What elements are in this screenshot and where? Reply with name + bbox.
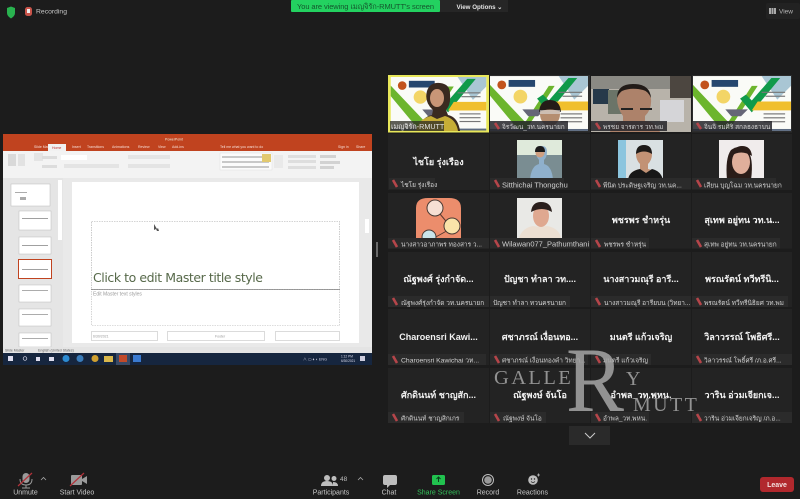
slide canvas: 6/30/2021 <box>93 334 109 338</box>
PowerPoint title bar: Transitions <box>87 145 104 149</box>
tile: name only <box>591 309 691 365</box>
status bar: English (United States) <box>38 348 74 352</box>
tile: name only: Charoensri Kawi... <box>399 332 478 342</box>
subtitle placeholder <box>91 289 340 326</box>
tile: name only: พชรพร ชำหรุ่น <box>604 240 647 248</box>
tile: name only <box>388 252 489 307</box>
tile: slide 4: จินจิ รมศิริ สกลธงธาบน <box>704 123 771 131</box>
status bar: Slide Master <box>5 348 25 352</box>
tile: name only: ณัฐพงศ์ รุ่งกำจัด... <box>403 273 474 285</box>
view options button: View Options ⌄ <box>456 4 502 11</box>
tile: name only <box>692 193 792 248</box>
participants: 48 <box>340 476 348 483</box>
tile: name only: พรณรัตน์ ทวีทรีนิ... <box>705 273 779 284</box>
chat <box>382 475 397 496</box>
PowerPoint title bar: Add-ins <box>172 145 184 149</box>
unmute <box>13 473 46 496</box>
divider handle <box>376 242 378 257</box>
cursor <box>154 224 159 231</box>
slide canvas: Footer <box>215 334 226 338</box>
tile: Wilawan: Wilawan077_Pathumthani <box>502 240 589 248</box>
tile: name only: วิลาวรรณ์ โพธิศรี... <box>703 331 780 342</box>
reactions: Reactions <box>517 490 549 496</box>
tile: man with glasses <box>591 76 691 132</box>
watermark: GALLERY RMUTT: Y <box>626 368 640 390</box>
tile: name only: ณัฐพงษ์ จันโอ <box>513 389 567 401</box>
tile: presenter: เมญจิรัก-RMUTT <box>391 122 445 131</box>
PowerPoint title bar: Home <box>52 146 61 150</box>
tile: name only <box>388 368 489 423</box>
windows taskbar: ∧ ▭ ♦ ◖ ENG <box>303 358 327 362</box>
tile: name only <box>490 309 590 365</box>
tile: name only: พรณรัตน์ ทวีทรีนิธิยศ วท.พม <box>704 299 784 307</box>
tile: name only: สุเทพ อยู่ทน วท.น... <box>704 215 780 226</box>
tile: name only <box>591 252 691 307</box>
leave button: Leave <box>767 482 787 489</box>
participants <box>313 475 363 496</box>
share screen: Share Screen <box>417 490 460 496</box>
tile: name only <box>388 309 489 365</box>
slide canvas <box>63 178 372 348</box>
tile: orange avatar icon: นางสาวอาภาพร ทองสาร ว... <box>401 242 482 248</box>
tile: name only: ณัฐพงษ์ จันโอ <box>503 414 542 422</box>
tile: name only: วาริน อ่วมเจียกเจ... <box>705 390 779 400</box>
tile: name only: วาริน อ่วมเจียกเจริญ /ภ.อ... <box>704 414 781 422</box>
tile: name only <box>591 193 691 248</box>
tile: participant with slide 2 <box>490 75 590 132</box>
tile: name only: มนตรี แก้วเจริญ <box>603 356 649 364</box>
share screen <box>417 475 460 496</box>
watermark: GALLERY RMUTT: GALLE <box>494 367 573 389</box>
gallery: participant tiles <box>388 75 792 423</box>
windows taskbar: 1:12 PM <box>341 354 353 358</box>
PowerPoint title bar: View <box>158 145 166 149</box>
tile: woman smiling <box>692 134 792 190</box>
ribbon <box>3 151 372 178</box>
tile: name only: ณัฐพงศ์รุ่งกำจัด วท.นครนายก <box>401 299 484 307</box>
windows taskbar: 6/30/2021 <box>341 359 355 363</box>
PowerPoint title bar: Slide Master <box>34 145 54 149</box>
screen share banner <box>291 0 440 12</box>
tile: Sitthichai <box>490 134 590 190</box>
tile: name only: วิลาวรรณ์ โพธิ์ศรี /ภ.อ.ศรี... <box>704 356 782 364</box>
tile: name only <box>490 368 590 423</box>
tile: name only <box>692 368 792 423</box>
subtitle placeholder: Edit Master text styles <box>93 292 142 298</box>
tile: woman smiling: เสียน บุญโฉม วท.นครนายก <box>704 182 782 190</box>
tile: Wilawan <box>490 193 590 248</box>
chat: Chat <box>382 490 396 496</box>
windows taskbar <box>3 353 372 365</box>
tile: man in black <box>591 134 691 190</box>
PowerPoint title bar: Insert <box>72 145 81 149</box>
icon: security shield <box>7 6 15 18</box>
tile: name only: นางสาวมณุรี อารียบน (วิทยา... <box>604 299 691 307</box>
record: Record <box>477 490 499 496</box>
footer placeholders <box>92 332 340 340</box>
next page button <box>569 426 610 445</box>
tile: man with glasses: พรชย จารดาร วท.พม <box>603 124 663 131</box>
tile: name only <box>692 252 792 307</box>
watermark: GALLERY RMUTT <box>494 329 699 431</box>
tile: slide 4 <box>692 75 792 132</box>
leave button <box>760 477 794 492</box>
tile: name only: ปัญชา ทำลา ทวนครนายก <box>493 299 566 307</box>
tile: name only: นางสาวมณุรี อารี... <box>603 274 679 285</box>
status bar <box>3 347 372 353</box>
start video <box>60 473 94 496</box>
tile: Sitthichai: Sitthichai Thongchu <box>502 180 568 190</box>
bottom toolbar <box>0 446 800 499</box>
view button: View <box>779 8 793 16</box>
tile: name only <box>591 368 691 423</box>
unmute: Unmute <box>13 490 38 496</box>
tile: name only: ศชาภรณ์ เงื่อนทอ... <box>502 330 578 342</box>
tile: name only: ศักดินนท์ ชาญสัก... <box>401 389 476 401</box>
slide thumbnails panel <box>3 178 63 348</box>
tile: name only: ศชาภรณ์ เงื่อนทองคำ วิทยา... <box>502 356 586 364</box>
start video: Start Video <box>60 490 94 496</box>
watermark: GALLERY RMUTT: R <box>566 329 625 431</box>
tile: name only: ไชโย รุ่งเรือง <box>412 156 464 168</box>
tile: name only <box>388 134 489 190</box>
tile: presenter <box>388 75 489 132</box>
recording label: Recording <box>36 8 67 16</box>
tile: name only: อำพล_วท.พหน. <box>611 390 671 400</box>
watermark: GALLERY RMUTT: MUTT <box>633 394 699 416</box>
view options button <box>440 0 508 12</box>
participants: Participants <box>313 490 350 496</box>
tile: name only: ปัญชา ทำลา วท.... <box>504 274 576 285</box>
PowerPoint title bar: PowerPoint <box>165 138 183 142</box>
tile: orange avatar icon <box>388 193 489 248</box>
tile: name only <box>490 252 590 307</box>
tile: name only: อำพล_วท.พหน. <box>603 414 647 422</box>
reactions <box>517 474 549 496</box>
view button <box>766 3 800 19</box>
icon: recording <box>25 7 32 16</box>
title placeholder <box>92 222 340 290</box>
record <box>477 474 499 496</box>
PowerPoint title bar: Share <box>356 145 365 149</box>
slide title: Click to edit Master title style <box>93 270 263 285</box>
tile: name only: มนตรี แก้วเจริญ <box>610 332 673 343</box>
tile: participant with slide 2: จิรวัฒน_วท.นครนายก <box>502 123 565 131</box>
PowerPoint title bar: Review <box>138 145 150 149</box>
tile: name only: ไชโย รุ่งเรือง <box>400 181 437 189</box>
tile: name only: พชรพร ชำหรุ่น <box>612 215 671 226</box>
shared screen: PowerPoint <box>3 134 372 365</box>
PowerPoint title bar: Animations <box>112 145 130 149</box>
tile: name only: สุเทพ อยู่ทน วท.นครนายก <box>704 242 777 248</box>
tile: name only <box>692 309 792 365</box>
PowerPoint title bar: Sign in <box>338 145 349 149</box>
screen share banner: You are viewing เมญจิรัก-RMUTT's screen <box>297 2 434 11</box>
tile: name only: ศักดินนท์ ชาญสิกเกร <box>401 414 460 422</box>
PowerPoint title bar <box>3 134 372 151</box>
tile: man in black: พีนิต ประดิษฐเจริญ วท.นค... <box>603 182 682 190</box>
tile: name only: Charoensri Kawichai วท... <box>401 358 479 364</box>
PowerPoint title bar: Tell me what you want to do <box>220 145 263 149</box>
